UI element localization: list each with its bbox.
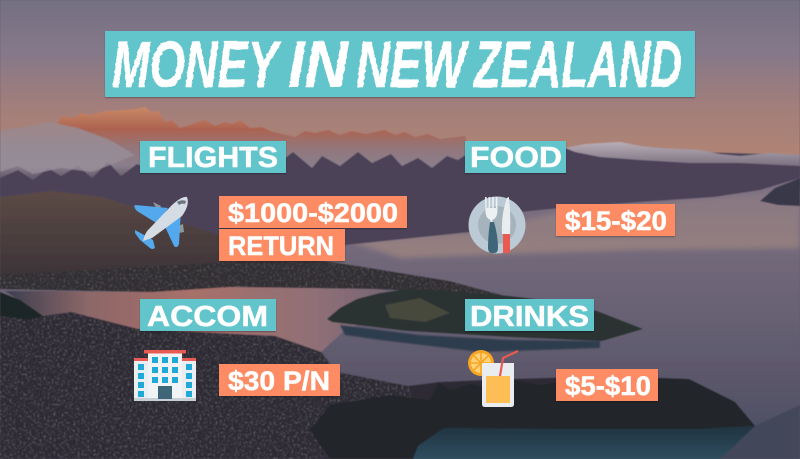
title text: IN [288,27,349,101]
heading: accom: ACCOM [147,301,268,333]
price note: return: RETURN [228,231,334,261]
icon: hotel building [134,350,196,401]
price: food: $15-$20 [565,206,667,236]
icon: juice glass with orange slice [468,350,518,407]
title text: MONEY [112,27,281,101]
panel: food [465,141,675,254]
icon: plane [134,197,188,249]
heading: flights: FLIGHTS [148,142,278,174]
title text: ZEALAND [473,27,682,101]
price: accom: $30 P/N [228,366,330,396]
panel: accommodation [134,299,340,401]
title text [112,27,682,101]
heading: food: FOOD [470,142,562,174]
panel: flights [134,141,407,261]
heading: drinks: DRINKS [470,301,589,333]
icon: plate with fork and knife [468,196,526,254]
panel: drinks [465,299,658,407]
title text: NEW [356,27,469,101]
price: flights: $1000-$2000 [228,198,398,228]
title banner [105,27,695,101]
price: drinks: $5-$10 [565,371,651,401]
